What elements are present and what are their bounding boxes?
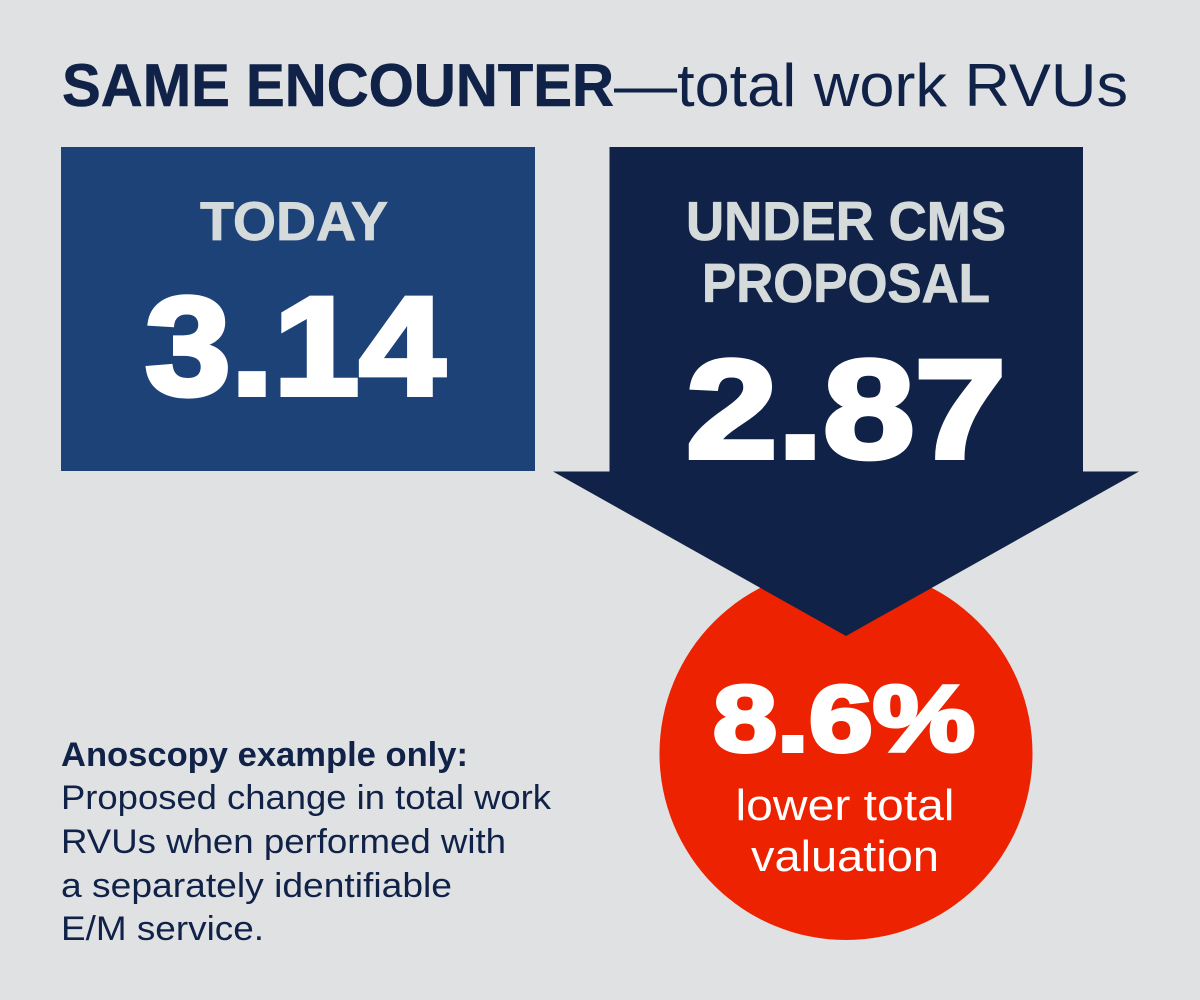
title xyxy=(62,52,1128,119)
panel: today xyxy=(61,147,535,471)
note: anoscopy example: Anoscopy example only: xyxy=(61,736,468,774)
label: lower total valuation: lower total xyxy=(736,781,954,830)
title: SAME ENCOUNTER xyxy=(62,52,614,119)
note: anoscopy example: RVUs when performed with xyxy=(61,823,506,861)
badge: 8.6% lower total valuation xyxy=(660,567,1032,940)
title: —total work RVUs xyxy=(614,52,1128,119)
value: 8.6%: 8.6% xyxy=(713,666,975,771)
arrow panel: under CMS proposal xyxy=(553,147,1139,636)
value: 2.87: 2.87 xyxy=(686,330,1006,488)
note: anoscopy example: E/M service. xyxy=(61,910,264,948)
heading: today: TODAY xyxy=(200,190,388,252)
note: anoscopy example: a separately identifiable xyxy=(61,867,452,905)
heading: under CMS proposal: PROPOSAL xyxy=(702,252,990,314)
note: anoscopy example: Proposed change in total work xyxy=(61,779,552,817)
heading: under CMS proposal xyxy=(686,190,1006,314)
heading: under CMS proposal: UNDER CMS xyxy=(686,190,1006,252)
value: 3.14: 3.14 xyxy=(145,268,445,424)
label: lower total valuation xyxy=(736,781,954,881)
label: lower total valuation: valuation xyxy=(751,832,939,881)
note: anoscopy example xyxy=(61,736,552,948)
